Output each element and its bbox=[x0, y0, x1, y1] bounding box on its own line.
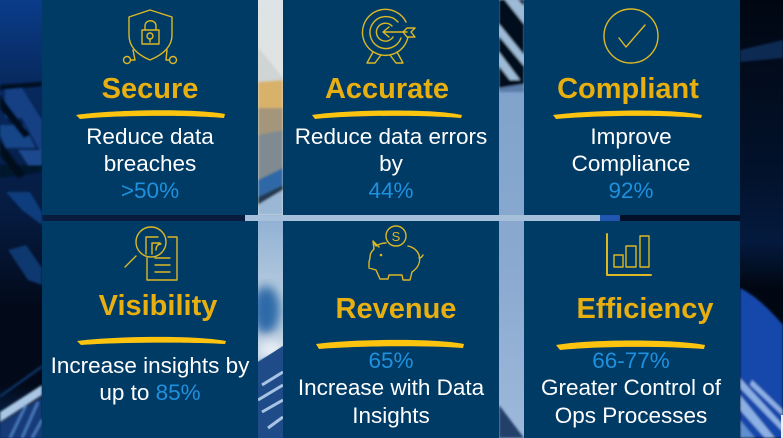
heading: Compliant: Compliant bbox=[557, 73, 699, 105]
underline stroke bbox=[77, 337, 226, 345]
heading: Revenue: Revenue bbox=[336, 293, 456, 325]
icon: piggy bank with coin: S bbox=[392, 229, 401, 244]
panel: Visibility bbox=[42, 221, 258, 438]
image edge mark bbox=[781, 415, 783, 438]
underline stroke bbox=[76, 110, 225, 119]
underline stroke bbox=[556, 340, 705, 350]
text: Increase insights by up to 85%: Increase insights by bbox=[51, 353, 249, 378]
text: Increase with Data Insights: Insights bbox=[352, 403, 430, 428]
panel: Revenue bbox=[283, 221, 499, 438]
icon: target with arrow bbox=[362, 9, 415, 63]
left tower panes bbox=[5, 88, 42, 155]
icon: shield with padlock bbox=[124, 10, 176, 64]
icon: piggy bank with coin bbox=[369, 226, 423, 280]
text: Increase with Data Insights: Increase with Data bbox=[298, 375, 484, 400]
icon: magnifier over document bbox=[125, 227, 177, 280]
stat: 65%: 65% bbox=[368, 348, 414, 373]
icon: bar chart bbox=[607, 234, 651, 275]
underline stroke bbox=[316, 340, 464, 349]
text: Improve Compliance: Compliance bbox=[572, 151, 690, 176]
text: Improve Compliance: Improve bbox=[590, 124, 672, 149]
text: Reduce data breaches: Reduce data bbox=[86, 124, 214, 149]
panel: Compliant bbox=[524, 0, 740, 215]
text: Reduce data errors by: by bbox=[379, 151, 404, 176]
icon: check in circle bbox=[604, 9, 658, 63]
underline stroke bbox=[312, 110, 462, 119]
sky gap: stripes bbox=[499, 0, 524, 88]
text: Reduce data errors by: Reduce data errors bbox=[295, 124, 487, 149]
text: Increase insights by up to 85%: up to 85% bbox=[99, 380, 201, 405]
heading: Visibility: Visibility bbox=[99, 290, 217, 322]
text: Greater Control of Ops Processes: Ops Processes bbox=[555, 403, 707, 428]
right tower bbox=[740, 40, 783, 62]
heading: Secure: Secure bbox=[102, 73, 198, 105]
stat: 44%: 44% bbox=[368, 178, 414, 203]
stat: 92%: 92% bbox=[608, 178, 654, 203]
panel: Efficiency bbox=[524, 221, 740, 438]
stat: >50%: >50% bbox=[121, 178, 179, 203]
heading: Efficiency: Efficiency bbox=[576, 293, 714, 325]
stat: 66-77%: 66-77% bbox=[592, 348, 670, 373]
panel: Secure bbox=[42, 0, 258, 215]
underline stroke bbox=[553, 110, 702, 119]
panel: Accurate bbox=[283, 0, 499, 215]
sky gap: building 1 bbox=[258, 47, 283, 88]
heading: Accurate: Accurate bbox=[325, 73, 449, 105]
text: Reduce data breaches: breaches bbox=[104, 151, 196, 176]
lower building corners bbox=[258, 346, 283, 438]
text: Greater Control of Ops Processes: Greater Control of bbox=[541, 375, 721, 400]
